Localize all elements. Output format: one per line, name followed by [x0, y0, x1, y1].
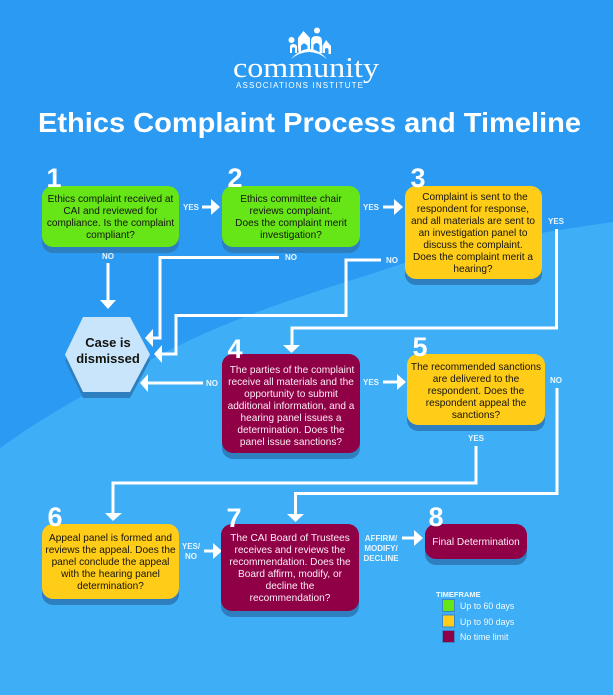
- panel: step 4: 4: [227, 334, 243, 364]
- panel: step 6: determination?: [77, 581, 144, 592]
- arrow: step 2 no to dismissed: NO: [285, 253, 297, 262]
- arrow: step 4 yes to step 5: [363, 374, 406, 390]
- panel: step 1: Ethics complaint received at: [48, 194, 174, 205]
- arrow: step 4 no to dismissed: NO: [206, 379, 218, 388]
- panel: step 1: 1: [46, 163, 62, 193]
- panel: step 1: compliant?: [86, 230, 135, 241]
- panel: step 2: Does the complaint merit: [235, 218, 347, 229]
- icon: houses and people: [288, 28, 331, 59]
- panel: step 6: with the hearing panel: [60, 569, 160, 580]
- panel: step 8: 8: [428, 502, 444, 532]
- panel: step 5: [407, 332, 545, 431]
- legend: no time limit: No time limit: [460, 632, 509, 642]
- panel: step 2: 2: [227, 163, 243, 193]
- arrow: step 4 yes to step 5: YES: [363, 378, 380, 387]
- panel: step 3: discuss the complaint.: [423, 240, 523, 251]
- arrow: step 2 yes to step 3: YES: [363, 203, 380, 212]
- panel: step 5: respondent. Does the: [428, 386, 525, 397]
- arrow: step 7 to step 8: [363, 530, 423, 563]
- arrow: step 7 to step 8: DECLINE: [363, 554, 399, 563]
- panel: step 2: [222, 163, 360, 253]
- legend heading: TIMEFRAME: [436, 590, 481, 599]
- panel: step 3: [405, 163, 542, 285]
- panel: step 1: compliance. Is the complaint: [47, 218, 174, 229]
- arrow: step 1 yes to step 2: YES: [183, 203, 200, 212]
- arrow: step 3 no to dismissed: [154, 256, 398, 363]
- panel: step 4: [222, 334, 360, 459]
- title: Ethics Complaint Process and Timeline: [38, 107, 581, 138]
- panel: case is dismissed: [65, 317, 150, 398]
- panel: step 5: 5: [412, 332, 428, 362]
- panel: step 6: [42, 502, 179, 605]
- panel: step 4: panel issue sanctions?: [240, 437, 342, 448]
- arrow: step 6 to step 7: NO: [185, 552, 197, 561]
- panel: step 4: additional information, and a: [228, 401, 355, 412]
- panel: step 5: respondent appeal the: [426, 398, 527, 409]
- panel: step 2: Ethics committee chair: [240, 194, 342, 205]
- legend: up to 90 days: Up to 90 days: [460, 617, 515, 627]
- panel: step 7: Board affirm, modify, or: [238, 569, 343, 580]
- arrow: step 1 yes to step 2: [183, 199, 220, 215]
- tagline: ASSOCIATIONS INSTITUTE: [236, 81, 363, 90]
- arrow: step 6 to step 7: YES/: [182, 542, 201, 551]
- panel: step 6: reviews the appeal. Does the: [45, 545, 176, 556]
- panel: step 1: [42, 163, 179, 253]
- arrow: step 7 to step 8: AFFIRM/: [365, 534, 398, 543]
- wordmark: community: [233, 52, 380, 84]
- panel: step 5: The recommended sanctions: [411, 362, 541, 373]
- panel: step 7: decline the: [266, 581, 315, 592]
- panel: step 2: reviews complaint.: [249, 206, 333, 217]
- panel: step 3: and all materials are sent to: [411, 216, 535, 227]
- logo: Community Associations Institute: [233, 28, 380, 90]
- panel: step 5: are delivered to the: [433, 374, 520, 385]
- arrow: step 5 yes to step 6: [105, 434, 485, 521]
- arrow: step 3 yes to step 4: [283, 217, 565, 353]
- arrow: step 4 no to dismissed: [140, 374, 218, 392]
- panel: step 3: hearing?: [453, 264, 493, 275]
- panel: step 7: 7: [226, 503, 242, 533]
- arrow: step 5 no to step 7: NO: [550, 376, 562, 385]
- panel: step 4: determination. Does the: [237, 425, 345, 436]
- panel: case is dismissed: dismissed: [76, 351, 140, 366]
- panel: step 6: panel conclude the appeal: [52, 557, 169, 568]
- panel: step 5: sanctions?: [452, 410, 501, 421]
- panel: step 4: hearing panel issues a: [240, 413, 342, 424]
- panel: step 7: The CAI Board of Trustees: [230, 533, 350, 544]
- panel: step 3: Does the complaint merit a: [413, 252, 533, 263]
- legend: timeframe: [436, 590, 515, 642]
- arrow: step 2 yes to step 3: [363, 199, 403, 215]
- panel: step 1: CAI and reviewed for: [63, 206, 158, 217]
- arrow: step 1 no to dismissed: [100, 252, 116, 309]
- panel: step 3: 3: [410, 163, 426, 193]
- panel: step 2: investigation?: [260, 230, 322, 241]
- arrow: step 3 no to dismissed: NO: [386, 256, 398, 265]
- panel: step 3: respondent for response,: [417, 204, 529, 215]
- panel: case is dismissed: Case is: [85, 335, 131, 350]
- arrow: step 2 no to dismissed: [145, 253, 297, 347]
- legend: up to 60 days: Up to 60 days: [460, 601, 515, 611]
- arrow: step 5 no to step 7: [287, 376, 562, 522]
- panel: step 7: recommendation?: [250, 593, 331, 604]
- panel: step 3: an investigation panel to: [419, 228, 528, 239]
- panel: step 7: receives and reviews the: [234, 545, 346, 556]
- arrow: step 7 to step 8: MODIFY/: [364, 544, 398, 553]
- arrow: step 3 yes to step 4: YES: [548, 217, 565, 226]
- arrow: step 1 no to dismissed: NO: [102, 252, 114, 261]
- panel: step 6: 6: [47, 502, 63, 532]
- arrow: step 5 yes to step 6: YES: [468, 434, 485, 443]
- panel: step 7: [221, 503, 359, 617]
- panel: step 7: recommendation. Does the: [229, 557, 351, 568]
- panel: step 4: opportunity to submit: [244, 389, 338, 400]
- panel: step 8: Final Determination: [432, 537, 520, 548]
- panel: step 8: [425, 502, 527, 565]
- panel: step 6: Appeal panel is formed and: [49, 533, 172, 544]
- arrow: step 6 to step 7: [182, 542, 222, 561]
- panel: step 4: The parties of the complaint: [230, 365, 354, 376]
- panel: step 3: Complaint is sent to the: [422, 192, 528, 203]
- panel: step 4: receive all materials and the: [228, 377, 354, 388]
